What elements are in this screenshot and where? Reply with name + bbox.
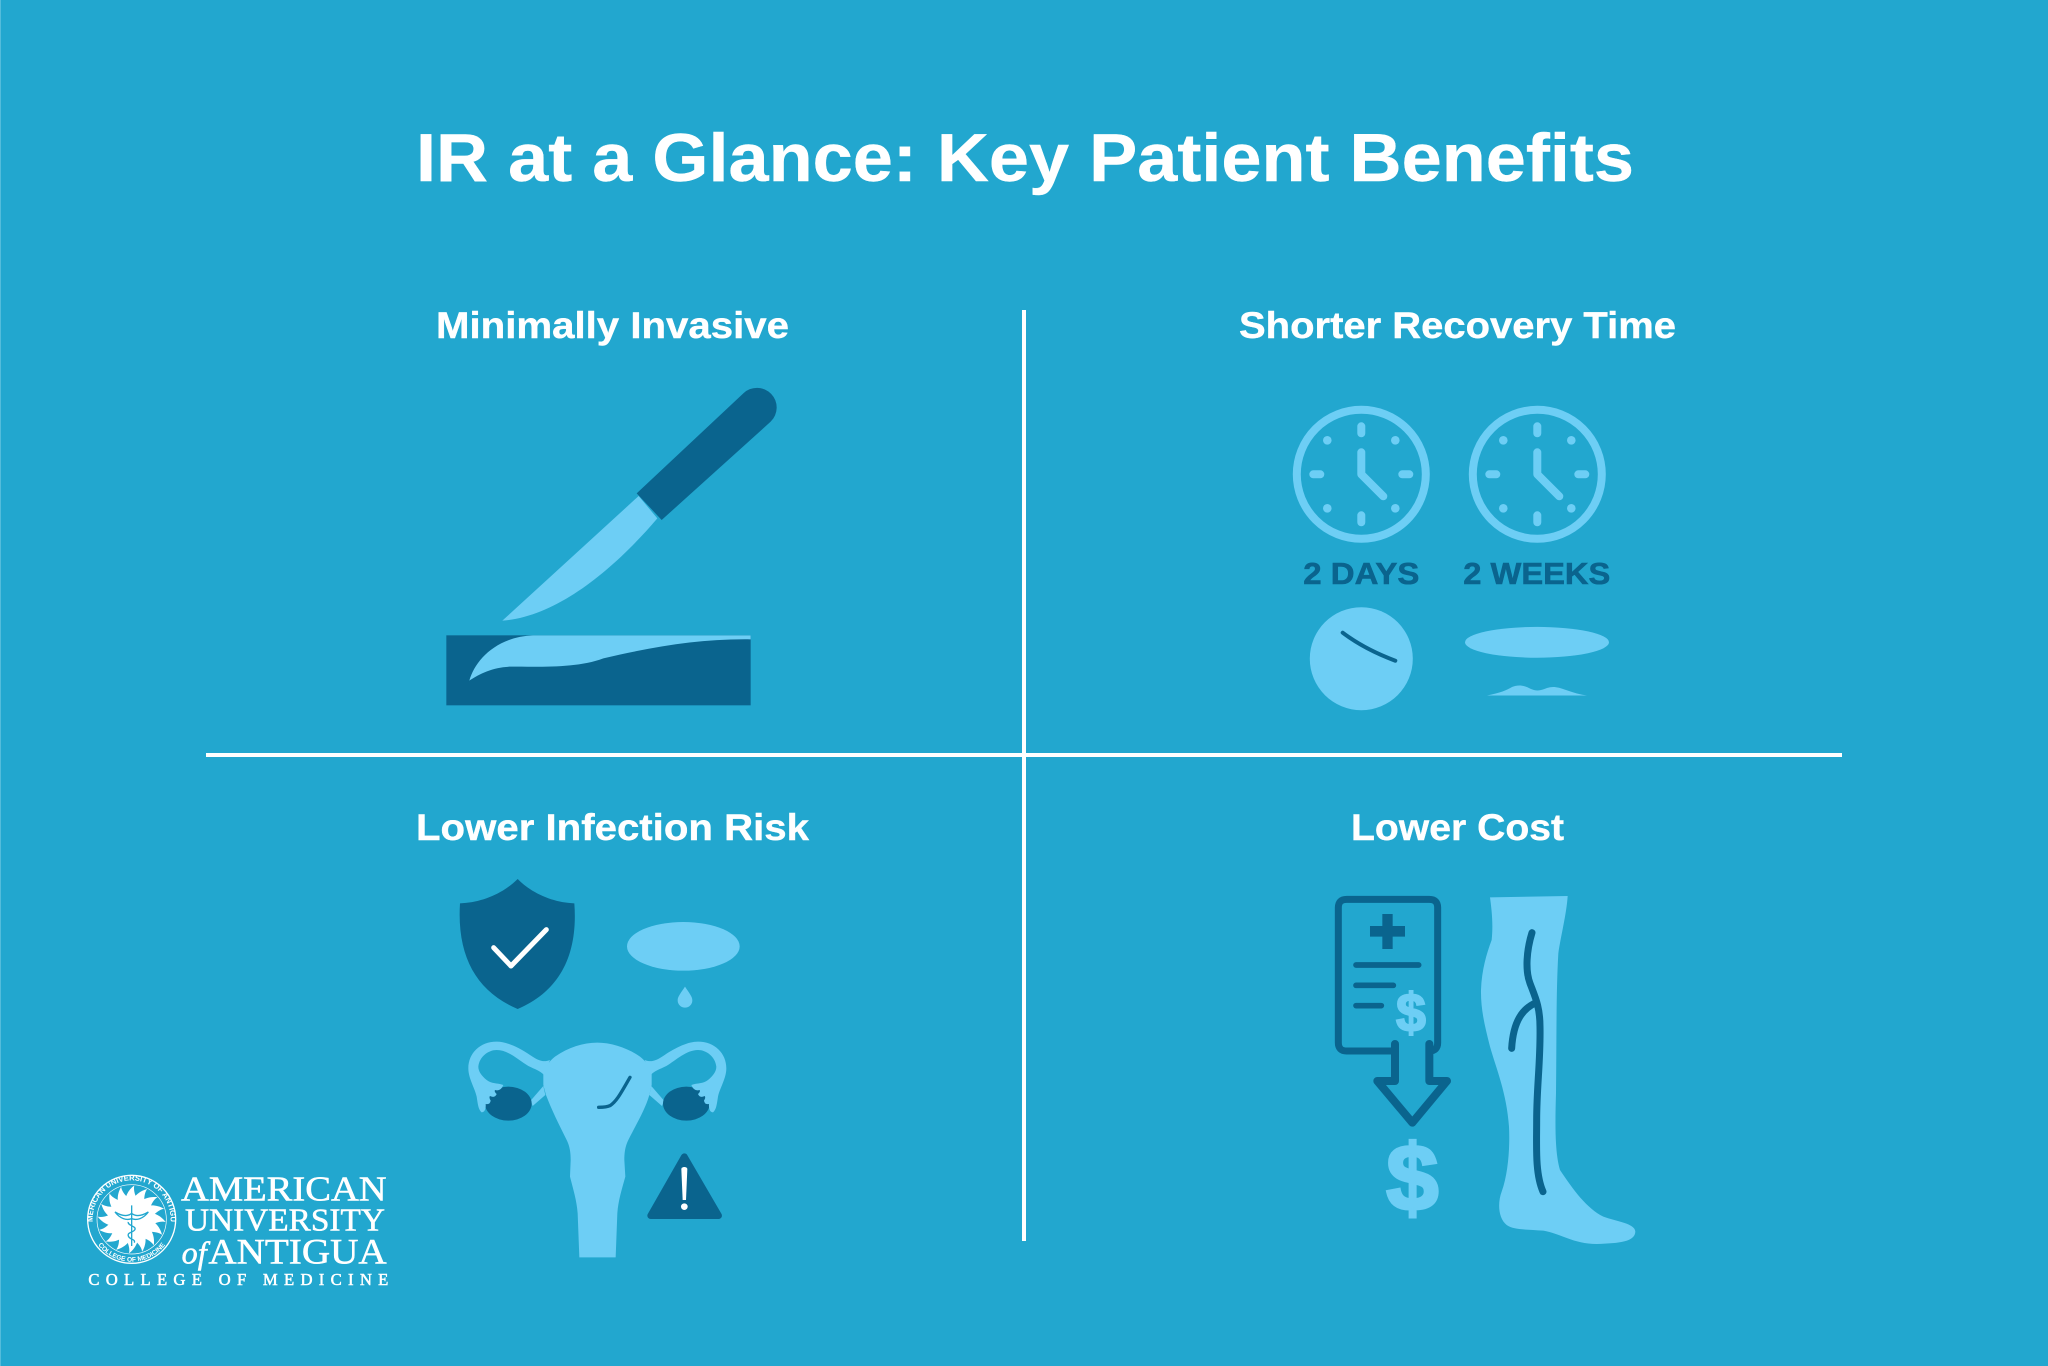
icon: uterus (468, 1042, 726, 1257)
icon: leg with vein (1481, 896, 1635, 1244)
heading: lower infection risk: Lower Infection Risk (416, 807, 809, 848)
skin block (446, 635, 751, 705)
icon: medical bill (1338, 899, 1438, 1051)
logo wordmark: UNIVERSITY (185, 1203, 385, 1238)
label: 2 days: 2 DAYS (1303, 556, 1419, 591)
icon: clock two weeks (1473, 410, 1602, 539)
panel: lower infection risk (416, 807, 809, 1257)
logo wordmark: COLLEGE OF MEDICINE (88, 1270, 388, 1289)
icon: scalpel and incision (446, 388, 777, 705)
icon: clock two days (1297, 410, 1426, 539)
heading: lower cost: Lower Cost (1351, 807, 1564, 848)
logo: American University of Antigua (87, 1171, 388, 1289)
icon: medical bill: $ (1396, 984, 1426, 1043)
incision (469, 635, 751, 681)
panel: lower cost (1338, 807, 1635, 1244)
icon: warning triangle (651, 1157, 719, 1216)
logo wordmark (88, 1171, 388, 1289)
scalpel blade (502, 496, 657, 621)
heading: shorter recovery time: Shorter Recovery Time (1239, 305, 1676, 346)
large dollar sign: $ (1386, 1125, 1438, 1230)
panel: minimally invasive (436, 305, 789, 705)
fallopian tube and ovary left (468, 1042, 550, 1121)
logo seal: AMERICAN UNIVERSITY OF ANTIGUA (87, 1175, 175, 1222)
logo seal (87, 1174, 176, 1264)
panel: shorter recovery time (1239, 305, 1676, 710)
label: 2 weeks: 2 WEEKS (1463, 556, 1610, 591)
logo wordmark: AMERICAN (181, 1171, 387, 1209)
fallopian tube and ovary right (645, 1042, 726, 1121)
arrow: down (1377, 1044, 1447, 1123)
icon: shield with check (460, 879, 575, 1009)
logo seal: COLLEGE OF MEDICINE (99, 1242, 166, 1262)
heading: minimally invasive: Minimally Invasive (436, 305, 789, 346)
icons: cost group (1338, 896, 1635, 1244)
icon: small wound (1310, 607, 1413, 710)
icons: infection group (460, 879, 740, 1257)
icon: large wound (1465, 627, 1609, 696)
title: IR at a Glance: Key Patient Benefits (416, 120, 1634, 196)
scalpel handle (637, 388, 777, 520)
logo wordmark: ANTIGUA (208, 1231, 387, 1271)
icon: wound with drop (627, 922, 740, 1008)
logo wordmark: of (182, 1234, 211, 1270)
